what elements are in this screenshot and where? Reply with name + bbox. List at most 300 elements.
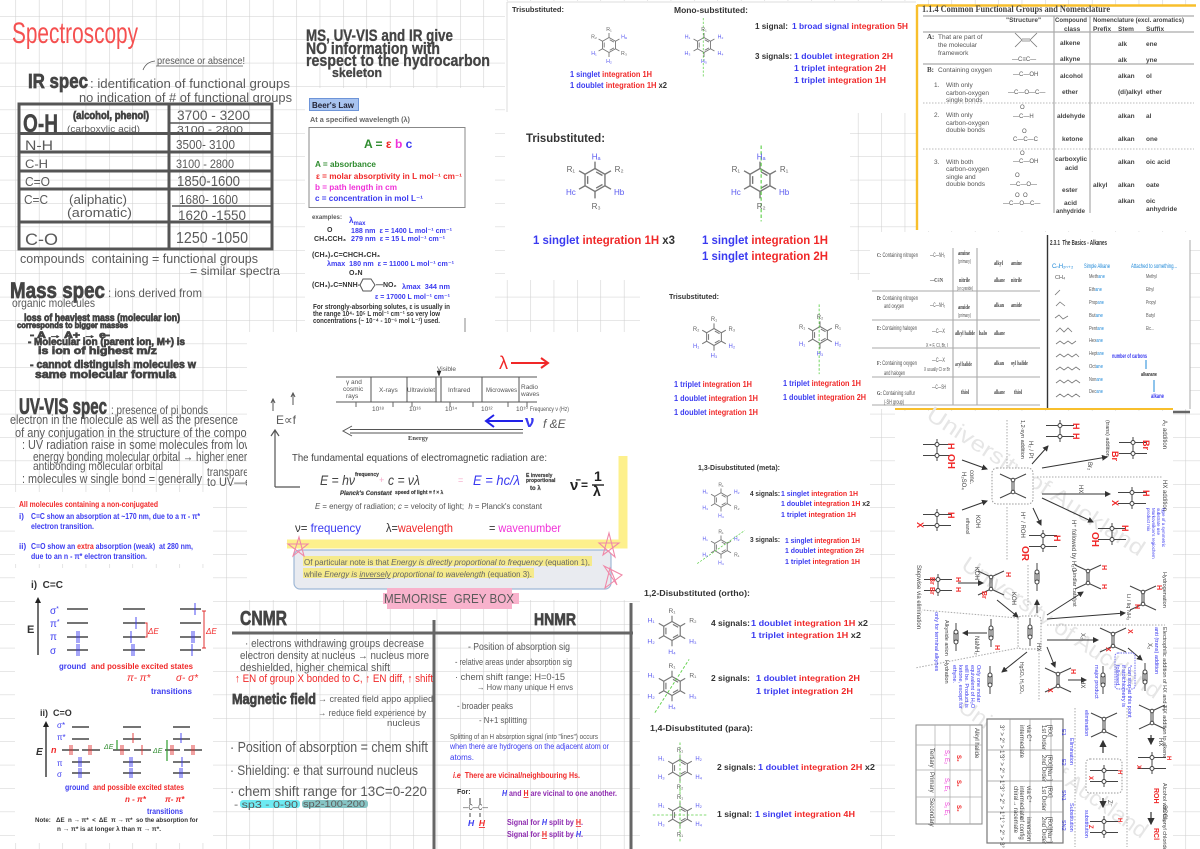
alkyne reactions: ethyne. [951, 665, 957, 684]
panel: functional groups table part 2: (or cyanide) [957, 286, 973, 292]
panel: UV-VIS spec [10, 394, 265, 489]
UV-VIS notes: transparent [207, 465, 258, 479]
panel: UV absorption note: electron transition. [31, 522, 94, 531]
examples: O₂N [349, 270, 363, 277]
diagram: C=O transitions: ii) C=O [40, 708, 72, 718]
1,2-disubstituted: H₃ [689, 638, 697, 645]
CNMR notes: ↑ EN of group X bonded to C, ↑ EN diff, ↑ shift [235, 673, 433, 685]
panel: functional groups table part 1: carbon-oxygen [946, 90, 989, 97]
diagram: C=C transitions: σ [50, 606, 56, 617]
1,3-disubstituted: 4 signals: [750, 489, 780, 498]
equations: speed of light = f × λ [395, 490, 444, 496]
mechanism comparison table: via C⁺ [1025, 725, 1032, 742]
alkene reactions: OR [1019, 546, 1030, 562]
ring: trisubstituted: H₂ [606, 59, 612, 65]
1,4-disubstituted: H₁ [658, 803, 664, 809]
watermark [922, 401, 1166, 843]
panel: basics of alkanes: Methane [1089, 274, 1105, 280]
CNMR notes [230, 638, 433, 799]
grey box: Of particular note is that Energy is directly proportional to frequency (equation 1), [304, 557, 590, 567]
mass spec notes: corresponds to bigger masses [17, 321, 129, 330]
examples: the range 10⁴- 10⁵ L mol⁻¹ cm⁻¹ so very low [313, 311, 440, 318]
frequency arrow: f &E [543, 417, 567, 431]
ring: symmetric trisubstituted: R₃ [592, 202, 601, 211]
IR absorption table: C-H [25, 157, 48, 171]
examples: examples: [312, 215, 342, 221]
diagram: C=C transitions [27, 580, 217, 696]
alkyne reactions: X [1104, 647, 1111, 652]
ring: with mirror axis: Hb [779, 188, 790, 197]
alkyne reactions: Stepwise via elimination [915, 565, 921, 629]
pink stars [288, 533, 622, 588]
alkene reactions: H [1071, 433, 1081, 440]
panel: functional groups table part 2: amide [1011, 303, 1022, 309]
ring: trisubstituted: H₁ [591, 51, 597, 57]
alkyne reactions: Br [928, 587, 935, 595]
mass spec notes: - cannot distinguish molecules w [30, 359, 196, 371]
panel: functional groups table part 1: With both [946, 159, 974, 166]
1,4-disubstituted: 1 signal: [717, 809, 752, 819]
UV-VIS notes: energy bonding molecular orbital → higher energy [33, 449, 258, 464]
1,2-disubstituted: H₂ [647, 693, 655, 700]
trisubstituted lower: 1 triplet integration 1H [674, 379, 752, 389]
examples: 188 nm ε = 1400 L mol⁻¹ cm⁻¹ [351, 228, 453, 235]
diagram: C=O transitions: π- π* [165, 795, 185, 804]
mechanism comparison table [987, 719, 1074, 848]
equations: E = hν [320, 472, 355, 488]
spectrum bar: 10¹⁸ [372, 406, 384, 413]
diagram: C=C transitions: ΔE [205, 627, 217, 636]
panel: functional groups table part 1: —C—O—C— [1008, 90, 1045, 96]
trisubstituted signal text: 1 doublet integration 1H x2 [570, 81, 668, 90]
yellow highlight [287, 456, 623, 544]
alkene reactions: H₂SO₄ [960, 472, 966, 490]
substrate outcome table [916, 725, 982, 827]
panel: functional groups table part 1: anhydride [1146, 206, 1177, 213]
UV-VIS notes [10, 403, 265, 489]
UV-VIS notes: : presence of pi bonds [111, 403, 208, 417]
panel: functional groups table part 1: alk [1118, 57, 1127, 64]
panel: functional groups table part 2: acyl halide [955, 362, 972, 368]
1,2-disubstituted: 1 doublet integration 2H [756, 673, 860, 683]
mass spec notes: : ions derived from [108, 286, 202, 300]
alkene reactions: A₂ addition [1161, 420, 1167, 449]
compounds note [20, 251, 280, 278]
panel: functional groups table part 1: Prefix [1093, 26, 1111, 33]
panel: basics of alkanes: Decane [1089, 389, 1103, 395]
diagram: C=C transitions: and possible excited states [91, 661, 193, 671]
diagram: C=C transitions: i) C=C [31, 580, 63, 591]
panel: functional groups table part 1: —C—H [1013, 114, 1034, 120]
panel: functional groups table part 2: X usually Cl or Br [924, 367, 950, 373]
IR absorption table: 1620 -1550 [178, 207, 246, 223]
mechanism comparison table: SN1 [1060, 790, 1066, 801]
panel: basics of alkanes: Etc... [1146, 326, 1154, 332]
alkyne reactions [915, 563, 1167, 718]
mechanism comparison table: E1 [1060, 729, 1066, 736]
panel: functional groups table part 1: alkan [1118, 136, 1135, 143]
IR absorption table: 3100 - 2800 [177, 125, 244, 136]
mono-substituted signal text: 1 triplet integration 2H [794, 63, 886, 73]
panel: functional groups table part 1: Suffix [1146, 26, 1164, 33]
mechanism comparison table: SN2 [1060, 820, 1066, 831]
IR absorption table: 3100 - 2800 [176, 157, 234, 171]
mechanism comparison table: of config [1018, 817, 1024, 840]
panel: functional groups table part 1: With only [946, 112, 973, 119]
panel: CNMR [230, 603, 633, 849]
alkyne reactions: NaNH₂ [973, 636, 979, 655]
1,4-disubstituted: R₁ [677, 748, 683, 754]
panel: functional groups table part 1: Compound [1055, 17, 1087, 24]
alkene reactions: KOH [974, 515, 980, 528]
alkyne reactions: HX [1035, 643, 1041, 651]
variable key: λ=wavelength [386, 521, 453, 535]
panel: functional groups table part 1: carbon-oxygen [946, 166, 989, 173]
trisubstituted lower: R₃ [728, 327, 736, 333]
alkyne reactions: Lindlar catalyst [1071, 570, 1077, 607]
diagram: C=O transitions: σ [57, 770, 62, 779]
HNMR notes: - broader peaks [457, 701, 513, 712]
large signal text: 1 singlet integration 1H x3 [533, 233, 675, 247]
panel: functional groups table part 1: O [1020, 151, 1025, 157]
alkyl halide reactions: Z [1087, 825, 1093, 829]
1,3-disubstituted: R₁ [718, 529, 724, 535]
diagram: C=C transitions: * [57, 619, 60, 626]
diagram: C=C transitions: σ [50, 646, 57, 657]
watermark: University of Auckland [954, 694, 1153, 843]
UV-VIS notes: to UV—en [207, 475, 257, 489]
1,2-disubstituted: 4 signals: [711, 618, 750, 628]
panel: functional groups table part 1: alkan [1118, 73, 1135, 80]
alkene reactions: OH [945, 454, 956, 469]
panel: functional groups table part 1: 2. [934, 112, 940, 119]
panel: functional groups table part 1: carboxylic [1055, 156, 1088, 163]
note: MS, UV-VIS and IR: respect to the hydrocarbon [306, 51, 490, 70]
compounds note: = similar spectra [190, 264, 280, 278]
mechanism comparison table: Elimination [1068, 738, 1074, 765]
diagram: C=O transitions: n [51, 745, 57, 755]
IR absorption table: (aromatic) [67, 205, 132, 220]
panel: functional groups table part 2: alkane [994, 278, 1005, 284]
panel: functional groups table part 2: alkane [994, 390, 1005, 396]
diagram: C=C transitions: E [27, 624, 34, 636]
alkyl halide reactions: RCl [1152, 828, 1159, 840]
diagram: C=O transitions: π [57, 759, 63, 768]
panel: functional groups table part 2: —C—X [932, 358, 945, 364]
watermark: University of Auckland [922, 401, 1150, 561]
presence note [143, 56, 245, 70]
panel: functional groups table part 1: acid [1064, 200, 1077, 207]
equations: ν̄ [570, 477, 581, 494]
ring: symmetric trisubstituted: R₁ [567, 165, 575, 174]
1,2-disubstituted: 1 doublet integration 1H x2 [751, 618, 868, 628]
panel: functional groups table part 2: thiol [1014, 390, 1022, 396]
alkyl halide reactions: H [1165, 756, 1171, 760]
grey box [294, 550, 611, 589]
panel: functional groups table part 1: alkene [1060, 40, 1081, 47]
IR description: no indication of # of functional groups [79, 90, 292, 105]
alkyl halide reactions: SOCl₂ [1161, 805, 1167, 822]
panel: Mass spec [10, 278, 202, 381]
1,4-disubstituted [650, 723, 875, 842]
panel: functional groups table part 1: ether [1146, 89, 1162, 96]
alkyl halide reactions: Z⁻ [1106, 800, 1112, 807]
panel: functional groups table part 2: (primary) [958, 259, 971, 265]
panel: functional groups table part 1: ketone [1062, 136, 1083, 143]
panel: functional groups table part 1: alk [1118, 41, 1127, 48]
IR description [79, 76, 292, 105]
1,3-disubstituted: H₂ [734, 490, 740, 496]
alkane naming note: number of carbons [1112, 354, 1147, 360]
formula box [309, 128, 465, 208]
HNMR notes: · chem shift range: H=0-15 [455, 672, 565, 682]
alkyl halide reactions [1083, 705, 1171, 849]
HNMR notes [455, 642, 573, 725]
panel: functional groups table part 1: 1. [934, 82, 940, 89]
panel: functional groups table part 1: —C—OH [1013, 72, 1038, 78]
panel: HNMR [449, 610, 617, 839]
equations [320, 468, 604, 499]
equations: frequency [355, 472, 379, 478]
UV-VIS notes: : UV radiation raise in some molecules from lower [22, 437, 263, 452]
alkyl halide reactions: ROH [1152, 788, 1159, 804]
trisubstituted signal text: 1 singlet integration 1H [570, 70, 652, 79]
1,3-disubstituted: 1,3-Disubstituted (meta): [698, 465, 780, 472]
large signal text [533, 233, 828, 263]
1,4-disubstituted: H₁ [658, 756, 664, 762]
ring: mono-substituted: H₄ [718, 51, 723, 57]
ring: with mirror axis: R₁ [732, 165, 740, 174]
IR absorption table: (aliphatic) [69, 192, 127, 207]
alkyne reactions: H [1069, 669, 1076, 674]
panel: functional groups table part 1: oate [1146, 182, 1160, 189]
substrate outcome table: Secondary [928, 798, 934, 827]
examples: λmax 344 nm [402, 283, 450, 291]
alkyne reactions: H [1133, 604, 1140, 609]
alkyne reactions: ketone, except for [957, 665, 963, 709]
panel: functional groups table part 1: That are part of [938, 34, 983, 41]
mass spec notes: same molecular formula [35, 369, 177, 381]
splitting note: —C—C— [463, 803, 488, 812]
spectrum bar: Infrared [448, 387, 471, 394]
panel: basics of alkanes: Octane [1089, 364, 1103, 370]
formula box: A = ε b c [364, 137, 413, 151]
1,3-disubstituted: H₂ [734, 537, 740, 543]
panel: functional groups table part 1: framework [938, 50, 969, 57]
substrate outcome table: S₂ [955, 755, 961, 762]
alkyne reactions: Hydration [943, 660, 949, 684]
diagram: C=C transitions: transitions [151, 686, 192, 696]
trisubstituted signal text [570, 70, 668, 90]
1,2-disubstituted: H₄ [668, 649, 676, 656]
splitting note: For: [457, 789, 471, 796]
panel: basics of alkanes [1047, 232, 1190, 409]
1,2-disubstituted: H₁ [648, 617, 655, 624]
mechanism comparison table: chiral→ racemate [1012, 786, 1018, 834]
panel: functional groups table part 1: Nomenclature (excl. aromatics) [1093, 17, 1184, 24]
alkyne reactions: *can stop at this point [1126, 665, 1132, 718]
spectrum bar: Visible [437, 366, 456, 373]
1,4-disubstituted: H₃ [658, 775, 665, 781]
alkyne reactions: Br [980, 591, 987, 599]
panel: basics of alkanes: Heptane [1089, 351, 1104, 357]
ring: symmetric trisubstituted: Hb [614, 188, 625, 197]
mechanism comparison table: [RX] [1046, 786, 1052, 798]
equations: 1 [594, 468, 602, 484]
diagram: C=C transitions: π [50, 632, 57, 643]
1,4-disubstituted: 2 signals: [717, 762, 756, 772]
examples: λ [349, 216, 353, 225]
alkene reactions: substrate use [1156, 508, 1161, 536]
panel: functional groups table part 2: alkyl [994, 261, 1003, 267]
panel: functional groups table part 2: G: Containing sulfur [877, 391, 915, 397]
alkyne reactions: H [954, 577, 961, 582]
spectrum bar: 10¹⁴ [445, 406, 457, 413]
UV-VIS notes: antibonding molecular orbital [33, 459, 163, 473]
spectrum bar: Radio [521, 384, 538, 391]
alkene reactions: H [946, 443, 956, 450]
trisubstituted lower: H₂ [835, 342, 842, 348]
CNMR notes: → reduce field experience by [318, 708, 426, 719]
panel: large trisubstituted [505, 113, 850, 280]
CNMR notes: Magnetic field [232, 691, 316, 708]
trisubstituted lower [669, 292, 866, 417]
examples: (CH₃)₂C=NNH- [312, 282, 361, 289]
panel: functional groups table part 2: alkan [994, 361, 1004, 367]
panel: functional groups table part 1: A: [927, 33, 934, 41]
panel: basics of alkanes: Ethyl [1146, 287, 1154, 293]
IR absorption table: C-O [25, 230, 58, 249]
1,4-disubstituted: R₁ [677, 832, 683, 838]
title: Spectroscopy [12, 17, 138, 50]
IR absorption table [19, 104, 272, 249]
splitting note: Splitting of an H absorption signal (into "lines") occurs [450, 732, 598, 741]
IR absorption table: (carboxylic acid) [67, 124, 140, 134]
panel: functional groups table part 2: —C—X [932, 329, 945, 335]
mass spec notes: - Molecular ion (parent ion, M+) is [28, 337, 185, 348]
big E arrow: E∝f [276, 413, 297, 427]
IR absorption table: 3500- 3100 [176, 137, 235, 152]
alkene reactions: H [1120, 525, 1130, 532]
substrate outcome table: S₂ [955, 805, 961, 812]
mechanism comparison table: 3° > 2° > 1° [998, 725, 1004, 756]
mechanism comparison table: 2nd Order [1040, 755, 1046, 782]
spectrum bar: 10¹⁰ [516, 406, 528, 413]
splitting note: H H [468, 818, 486, 828]
alkyne reactions: H [993, 645, 1000, 650]
panel: functional groups table part 2: amide [958, 305, 970, 311]
1,4-disubstituted: R₂ [677, 785, 684, 791]
equations: Planck's Constant [340, 491, 393, 497]
panel: large trisubstituted: Trisubstituted: [526, 131, 605, 145]
panel: basics of alkanes: 2.3.1 The Basics - Alkanes [1050, 240, 1107, 247]
diagram: C=O transitions: E [36, 747, 43, 758]
ring: with mirror axis [731, 146, 790, 221]
note: MS, UV-VIS and IR: skeleton [332, 65, 382, 80]
alkyne reactions: X₂ [1146, 643, 1152, 650]
mono-substituted signal text: 1 doublet integration 2H [794, 51, 893, 61]
HNMR notes: - Position of absorption sig [468, 642, 570, 653]
UV-VIS notes: electron in the molecule as well as the presence [10, 412, 238, 427]
1,3-disubstituted: 1 doublet integration 2H [785, 546, 864, 555]
alkyne reactions: major product [1093, 665, 1099, 699]
alkyne reactions: H [1100, 565, 1107, 570]
Beer's Law heading: Beer's Law [312, 101, 355, 110]
variable key [295, 521, 561, 535]
ring: trisubstituted: Hₐ [621, 34, 627, 40]
alkyne reactions: Br [928, 577, 935, 585]
1,2-disubstituted: 1 triplet integration 2H [756, 686, 853, 696]
panel: functional groups table part 2: X = F, Cl, Br, I [926, 343, 948, 349]
panel: functional groups table part 1: ol [1146, 73, 1152, 80]
panel: functional groups table part 2: and oxygen [884, 304, 904, 310]
large signal text: 1 singlet integration 1H [702, 233, 828, 247]
IR absorption table: N-H [25, 137, 53, 153]
CNMR notes: nucleus [387, 718, 420, 729]
equations: + [379, 475, 384, 485]
panel: functional groups table part 1: —C—O— [1010, 182, 1037, 188]
panel: functional groups table part 1: —C—O—C— [1003, 201, 1040, 207]
1,4-disubstituted: 1 singlet integration 4H [755, 809, 855, 819]
panel: functional groups table part 1: O [1015, 173, 1020, 179]
panel: Beer's Law: At a specified wavelength (λ) [310, 116, 410, 124]
alkyne reactions: Li / liq NH₃ [1125, 594, 1131, 620]
panel: functional groups table part 1: "Structure" [1006, 17, 1041, 24]
1,3-disubstituted: H₁ [702, 537, 708, 543]
diagram: C=O transitions: π* [57, 733, 66, 742]
panel: functional groups table part 1: O [1022, 129, 1027, 135]
panel: functional groups table part 1: double bonds [946, 181, 986, 188]
panel: functional groups table part 1: anhydride [1056, 208, 1085, 215]
alkene reactions: HX [1077, 485, 1083, 493]
hybridisation ranges [234, 799, 368, 811]
panel: IR spec [19, 56, 292, 278]
splitting note: H and H are vicinal to one another. [502, 789, 617, 798]
ring: trisubstituted: R₁ [606, 27, 612, 33]
panel: Beer's Law [305, 88, 495, 336]
panel: functional groups table part 1: alkan [1118, 182, 1135, 189]
1,2-disubstituted: R₂ [689, 617, 697, 624]
formula box: c = concentration in mol L⁻¹ [315, 194, 423, 203]
panel: functional groups table part 2: alkyl halide [955, 331, 975, 337]
alkene reactions: OH [1089, 532, 1100, 547]
equations: proportional [526, 478, 556, 484]
panel: functional groups table part 2: amine [958, 251, 970, 257]
panel: functional groups table part 1: —C—OH [1013, 159, 1038, 165]
panel: functional groups table part 2: alkane [994, 331, 1005, 337]
ring: with mirror axis: Hc [731, 188, 741, 197]
panel: functional groups table part 1: class [1064, 26, 1081, 33]
panel: basics of alkanes: Pentane [1089, 326, 1104, 332]
IR absorption table: (alcohol, phenol) [73, 110, 149, 122]
formula box: A = absorbance [315, 160, 377, 169]
note: MS, UV-VIS and IR [306, 26, 490, 80]
mechanism comparison table: [RX] [1046, 725, 1052, 737]
panel: functional groups table part 2: F: Containing oxygen [877, 361, 917, 367]
1,4-disubstituted: H₂ [695, 756, 703, 762]
heading: UV-VIS spec: UV-VIS spec [19, 394, 107, 419]
panel: functional groups table part 2: C: Containing nitrogen [877, 253, 918, 259]
Beer's Law heading [310, 98, 358, 110]
alkyne reactions: Electrophilic addition of HX and X₂ [1161, 627, 1167, 711]
ring: trisubstituted: R₂ [591, 34, 597, 40]
spectrum bar: Frequency ν (Hz) [527, 406, 569, 413]
ring: mono-substituted: H₃ [685, 51, 690, 57]
diagram: C=C transitions: ground [59, 661, 86, 671]
equations: = [458, 475, 463, 485]
alkene reactions: X [1110, 500, 1120, 506]
CNMR notes: · electrons withdrawing groups decrease [245, 638, 424, 650]
